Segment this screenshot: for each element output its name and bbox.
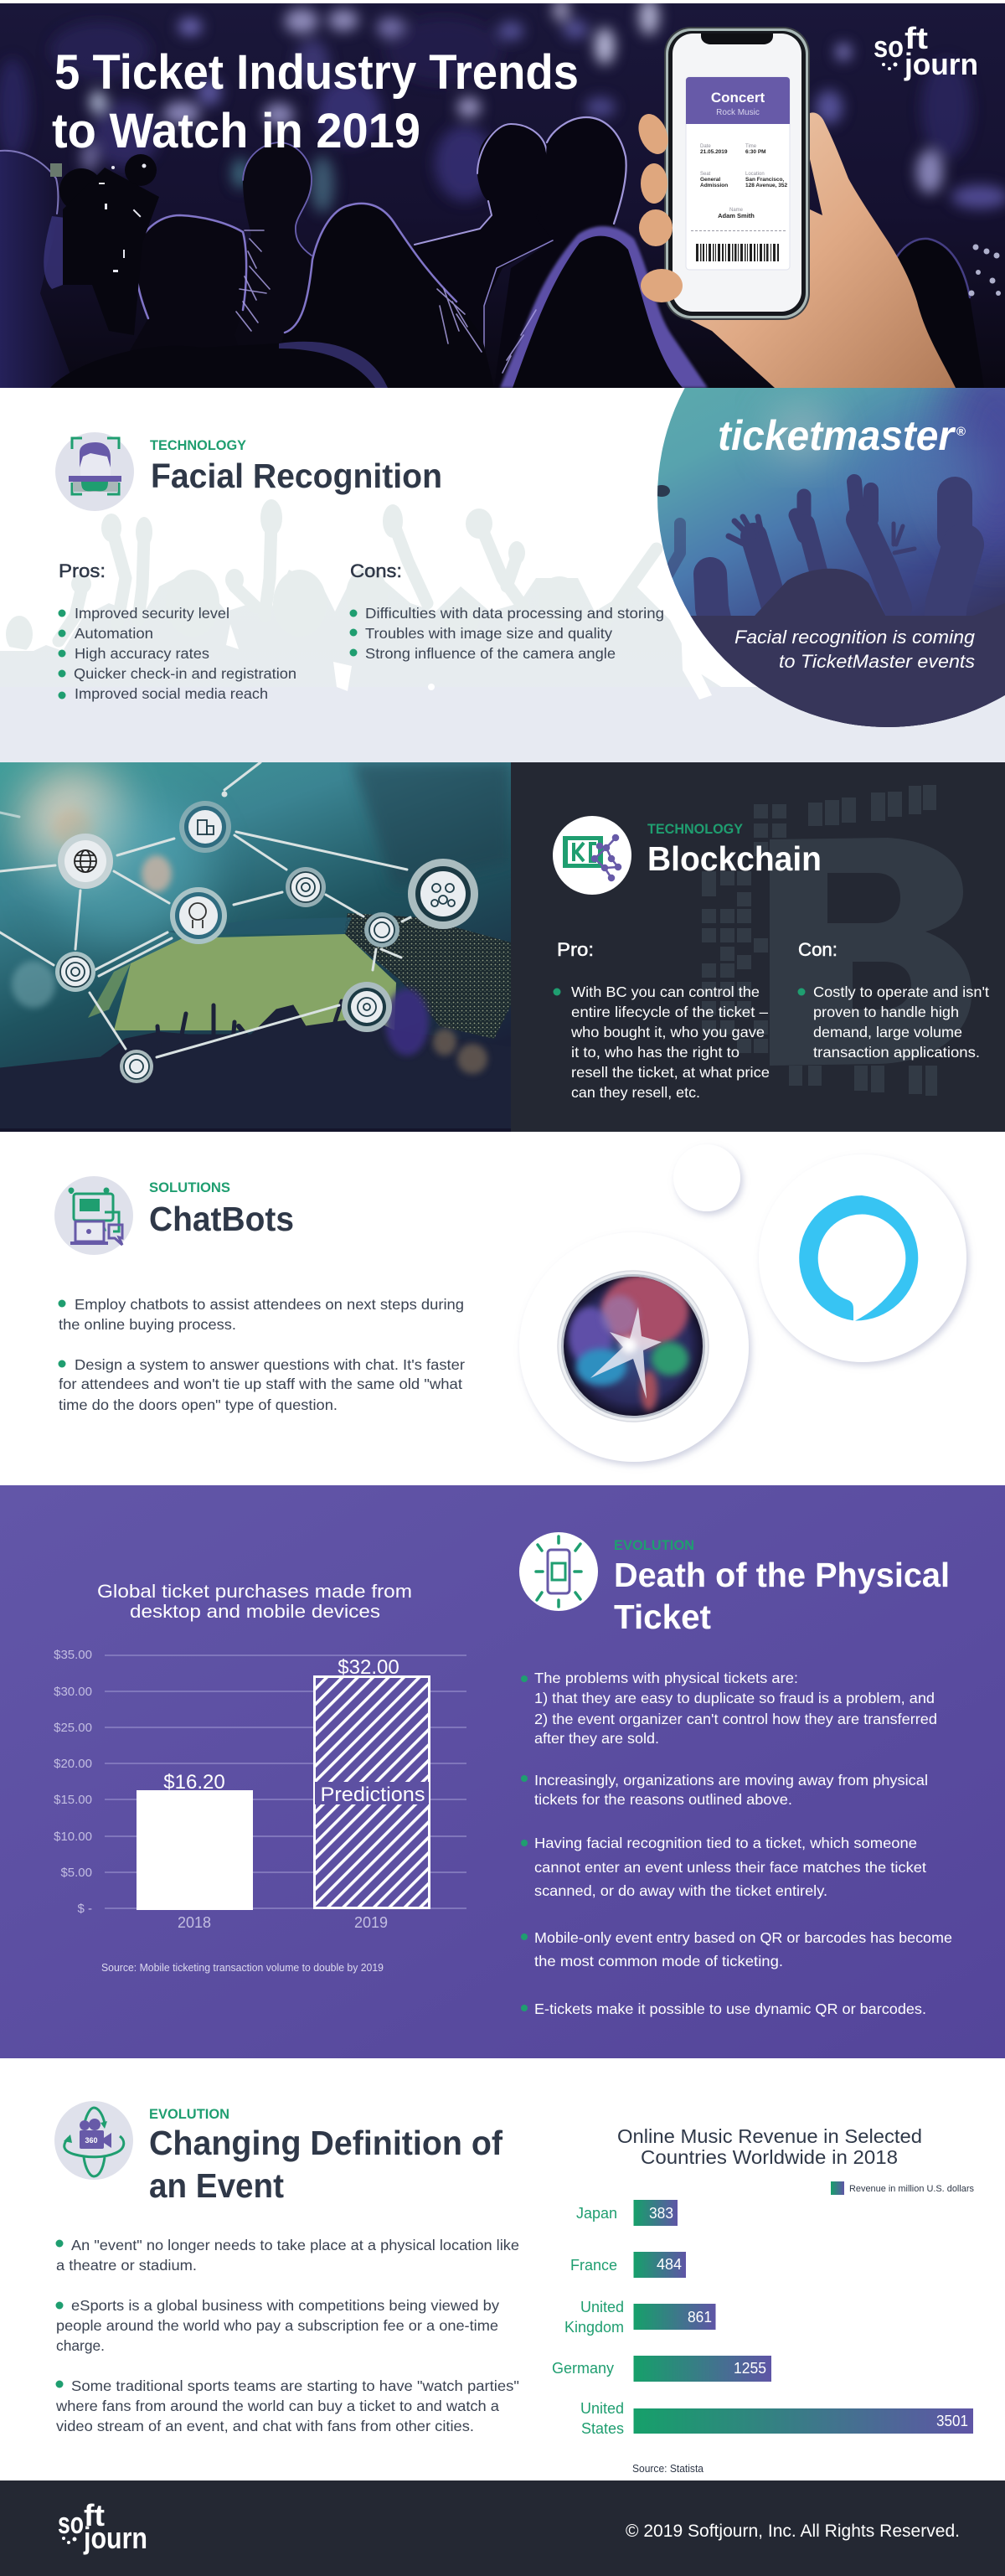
bar: japan: 383 — [649, 2205, 673, 2222]
cons list — [350, 560, 664, 662]
person: short hair with fringes — [132, 216, 245, 346]
football field — [114, 934, 396, 1030]
bar: france: 484 — [657, 2256, 682, 2273]
hero photo: concert crowd — [0, 0, 1005, 388]
pros list: Quicker check-in and registration — [74, 665, 296, 682]
changing definition text: charge. — [56, 2337, 105, 2354]
changing definition text — [55, 2237, 519, 2434]
logo: softjourn — [874, 27, 977, 80]
heading: blockchain: Blockchain — [647, 839, 822, 878]
bar 2019: $32.00 — [338, 1656, 399, 1679]
chatbots text: time do the doors open" type of question. — [59, 1396, 338, 1413]
callout: Facial recognition is coming — [734, 627, 976, 648]
con text: Con: — [798, 939, 838, 960]
changing definition text: a theatre or stadium. — [56, 2257, 197, 2274]
bar: japan — [576, 2200, 678, 2226]
ticket: General — [700, 177, 720, 183]
cons list: Cons: — [350, 560, 402, 581]
bar: united states: United — [580, 2400, 624, 2417]
logo: softjourn: journ — [904, 47, 978, 81]
stage lights right — [968, 245, 1001, 297]
bar 2019 — [313, 1656, 430, 1931]
title: 5 Ticket Industry Trends — [54, 45, 579, 100]
ticket: 128 Avenue, 352 — [745, 183, 787, 188]
ticket — [686, 77, 790, 270]
con text — [797, 939, 989, 1061]
pros list: Improved social media reach — [75, 685, 268, 702]
chatbots text — [59, 1296, 465, 1413]
bar: united kingdom — [564, 2299, 715, 2336]
bar 2018: 2018 — [178, 1914, 211, 1931]
person: long hair centre — [312, 204, 489, 369]
panel: blockchain — [511, 762, 1005, 1132]
logo: softjourn — [58, 2498, 147, 2555]
logo: ticketmaster: ® — [956, 425, 966, 439]
faint crowd silhouette — [0, 499, 1005, 762]
chatbots text: Employ chatbots to assist attendees on next steps during — [75, 1296, 464, 1313]
panel: blockchain photo — [0, 762, 511, 1132]
icon: facial recognition — [55, 432, 134, 511]
heading: death of the physical ticket: Ticket — [614, 1598, 711, 1636]
chart source: statista: Source: Statista — [632, 2462, 704, 2475]
chart source: Source: Mobile ticketing transaction volume to double by 2019 — [101, 1961, 384, 1974]
pro text: can they resell, etc. — [571, 1084, 700, 1101]
bar: germany: Germany — [552, 2360, 614, 2377]
heading: chatbots: SOLUTIONS — [149, 1180, 230, 1195]
network nodes — [55, 801, 478, 1083]
pros list: High accuracy rates — [75, 645, 209, 662]
ticket: 6:30 PM — [745, 149, 766, 155]
ticket: Time — [745, 144, 757, 149]
logo: softjourn: so — [874, 29, 904, 64]
stands with spectators — [343, 913, 511, 1039]
legend: Revenue in million U.S. dollars — [849, 2184, 974, 2194]
physical ticket text: the most common mode of ticketing. — [534, 1953, 783, 1969]
logo: softjourn: so — [58, 2506, 84, 2540]
pro text: who bought it, who you gave — [570, 1024, 765, 1040]
bar chart: $30.00 — [54, 1685, 92, 1699]
changing definition text: video stream of an event, and chat with fans from other cities. — [56, 2418, 474, 2434]
ticket: Seat — [700, 172, 711, 177]
bar: japan: Japan — [576, 2205, 617, 2222]
ticket: Concert — [711, 90, 765, 106]
bar: germany — [552, 2356, 771, 2382]
title — [52, 54, 577, 147]
physical ticket text: after they are sold. — [534, 1730, 659, 1747]
chart title: online music revenue: Online Music Revenue in Selected — [617, 2125, 922, 2147]
bar: united states: States — [581, 2420, 624, 2437]
bar chart: $ - — [77, 1902, 92, 1916]
bar: united states — [580, 2400, 973, 2437]
changing definition text: An "event" no longer needs to take place at a physical location like — [71, 2237, 519, 2253]
bar 2018: $16.20 — [163, 1771, 225, 1794]
pro text: entire lifecycle of the ticket – — [571, 1004, 768, 1020]
chatbots text: Design a system to answer questions with chat. It's faster — [75, 1356, 465, 1373]
callout: to TicketMaster events — [779, 651, 975, 672]
chatbots text: the online buying process. — [59, 1316, 236, 1333]
changing definition text: people around the world who pay a subscription fee or a one-time — [56, 2317, 498, 2334]
person: man with collar — [412, 125, 552, 340]
panel: chatbots — [0, 1132, 1005, 1485]
heading: facial recognition — [150, 437, 442, 495]
heading: death of the physical ticket: Death of the Physical — [614, 1556, 950, 1594]
physical ticket text: 1) that they are easy to duplicate so fraud is a problem, and — [534, 1690, 935, 1706]
heading: blockchain: TECHNOLOGY — [647, 821, 744, 837]
audience silhouettes — [0, 117, 984, 388]
ticket: Date — [700, 144, 711, 149]
physical ticket text: 2) the event organizer can't control how they are transferred — [534, 1711, 937, 1727]
heading: changing definition: EVOLUTION — [149, 2106, 229, 2122]
heading: changing definition — [149, 2106, 502, 2205]
heading: chatbots — [149, 1180, 294, 1238]
left stand lights — [12, 961, 55, 1008]
physical ticket text: The problems with physical tickets are: — [534, 1670, 798, 1686]
fingers — [638, 114, 683, 302]
con text: demand, large volume — [813, 1024, 962, 1040]
chart title: online music revenue — [617, 2125, 922, 2168]
heading: death of the physical ticket — [614, 1537, 950, 1636]
panel: death of the physical ticket — [0, 1485, 1005, 2058]
bar chart: $5.00 — [60, 1866, 92, 1880]
person: second man — [499, 118, 625, 348]
small empty circle — [673, 1144, 740, 1211]
bar: france — [570, 2252, 686, 2278]
pro text: it to, who has the right to — [571, 1044, 740, 1061]
physical ticket text: E-tickets make it possible to use dynamic QR or barcodes. — [534, 2000, 926, 2017]
changing definition text: Some traditional sports teams are starting to have "watch parties" — [71, 2377, 519, 2394]
footer — [0, 2480, 1005, 2576]
foreground dark mass — [50, 351, 129, 388]
con text: transaction applications. — [813, 1044, 980, 1061]
heading: death of the physical ticket: EVOLUTION — [614, 1537, 694, 1553]
bar chart: $35.00 — [54, 1648, 92, 1662]
legend — [831, 2181, 974, 2195]
bitcoin pixel watermark — [702, 785, 972, 1096]
phone with ticket — [664, 27, 810, 320]
ticket: 21.05.2019 — [700, 149, 728, 155]
icon: 360 video: 360 — [85, 2136, 98, 2145]
bar chart: $15.00 — [54, 1793, 92, 1807]
heading: changing definition: an Event — [149, 2166, 284, 2205]
bar: united states: 3501 — [936, 2413, 968, 2429]
cons list: Strong influence of the camera angle — [365, 645, 616, 662]
cons list: Troubles with image size and quality — [365, 625, 612, 642]
panel: facial recognition — [0, 388, 1005, 762]
logo: softjourn: ft — [84, 2498, 105, 2532]
changing definition text: eSports is a global business with competitions being viewed by — [71, 2297, 499, 2314]
bar 2019: 2019 — [354, 1914, 388, 1931]
title: to Watch in 2019 — [52, 104, 420, 158]
pro text — [553, 939, 770, 1101]
heading: blockchain — [647, 821, 822, 878]
person behind camera — [236, 143, 312, 333]
camera rig — [50, 154, 159, 335]
cons list: Difficulties with data processing and storing — [365, 605, 664, 622]
pros list — [59, 560, 296, 702]
chart title: desktop and mobile devices — [130, 1601, 380, 1622]
bar chart: $25.00 — [54, 1721, 92, 1735]
pro text: With BC you can control the — [571, 983, 760, 1000]
chart title: online music revenue: Countries Worldwide in 2018 — [641, 2146, 898, 2168]
callout — [735, 630, 975, 668]
physical ticket text — [521, 1670, 952, 2017]
crowd silhouette and lower shadow — [0, 1001, 511, 1132]
changing definition text: where fans from around the world can buy a ticket to and watch a — [55, 2398, 499, 2414]
lit hair fringes — [236, 230, 536, 373]
pro text: Pro: — [557, 939, 594, 960]
physical ticket text: tickets for the reasons outlined above. — [534, 1791, 792, 1808]
icon: hand holding phone — [633, 27, 956, 388]
logo: ticketmaster — [719, 419, 966, 451]
bar: united kingdom: United — [580, 2299, 624, 2315]
bar: united kingdom: 861 — [688, 2309, 712, 2326]
alexa circle — [759, 1154, 966, 1362]
bar: germany: 1255 — [734, 2360, 766, 2377]
bar: france: France — [570, 2257, 617, 2274]
bar chart: $10.00 — [54, 1830, 92, 1844]
pros list: Pros: — [59, 560, 106, 581]
bar chart: $20.00 — [54, 1757, 92, 1771]
bar 2019: Predictions — [320, 1784, 425, 1806]
foreground person with lit hair — [500, 226, 708, 388]
pros list: Automation — [75, 625, 153, 642]
physical ticket text: scanned, or do away with the ticket entirely. — [534, 1882, 827, 1899]
bar chart — [54, 1648, 466, 1931]
network lines — [0, 762, 410, 1057]
heading: changing definition: Changing Definition of — [149, 2124, 502, 2162]
panel: changing definition of an event — [0, 2058, 1005, 2480]
icon: blockchain — [553, 816, 631, 895]
person: right head — [898, 240, 981, 367]
hero panel — [0, 0, 1005, 388]
icon: chatbot — [54, 1176, 133, 1255]
physical ticket text: cannot enter an event unless their face matches the ticket — [534, 1859, 926, 1876]
chart title: Global ticket purchases made from — [97, 1581, 412, 1602]
physical ticket text: Increasingly, organizations are moving away from physical — [534, 1772, 928, 1789]
logo: ticketmaster: ticketmaster — [718, 412, 956, 459]
siri circle — [519, 1232, 749, 1462]
ticket: Name — [729, 208, 744, 213]
person far left — [0, 151, 75, 388]
ticket: Adam Smith — [718, 212, 755, 219]
icon: phone ticket — [519, 1532, 598, 1611]
barcode — [696, 244, 779, 261]
physical ticket text: Mobile-only event entry based on QR or barcodes has become — [534, 1929, 952, 1946]
horizontal bar chart — [552, 2200, 973, 2437]
logo: softjourn: ft — [904, 21, 928, 55]
chatbots text: for attendees and won't tie up staff with the same old "what — [59, 1376, 462, 1392]
ticket: Rock Music — [716, 108, 760, 117]
heading: facial recognition: TECHNOLOGY — [150, 437, 247, 453]
ticket: San Francisco, — [745, 177, 784, 183]
pros list: Improved security level — [75, 605, 229, 622]
ticketmaster circle — [657, 388, 1005, 727]
chart title — [97, 1581, 412, 1622]
icon: 360 video — [54, 2101, 133, 2180]
con text: Costly to operate and isn't — [813, 983, 989, 1000]
bar 2018 — [137, 1771, 253, 1931]
physical ticket text: Having facial recognition tied to a ticket, which someone — [534, 1835, 917, 1851]
ticket: Location — [745, 172, 765, 177]
raised hands silhouettes — [666, 482, 963, 645]
copyright: © 2019 Softjourn, Inc. All Rights Reserved. — [626, 2522, 960, 2541]
bar: united kingdom: Kingdom — [564, 2319, 624, 2336]
pro text: resell the ticket, at what price — [571, 1064, 770, 1081]
white gaps in crowd — [0, 624, 712, 699]
ticket: Admission — [700, 183, 728, 188]
heading: chatbots: ChatBots — [149, 1200, 294, 1238]
logo: softjourn: journ — [83, 2521, 147, 2555]
heading: facial recognition: Facial Recognition — [151, 457, 442, 495]
con text: proven to handle high — [813, 1004, 959, 1020]
